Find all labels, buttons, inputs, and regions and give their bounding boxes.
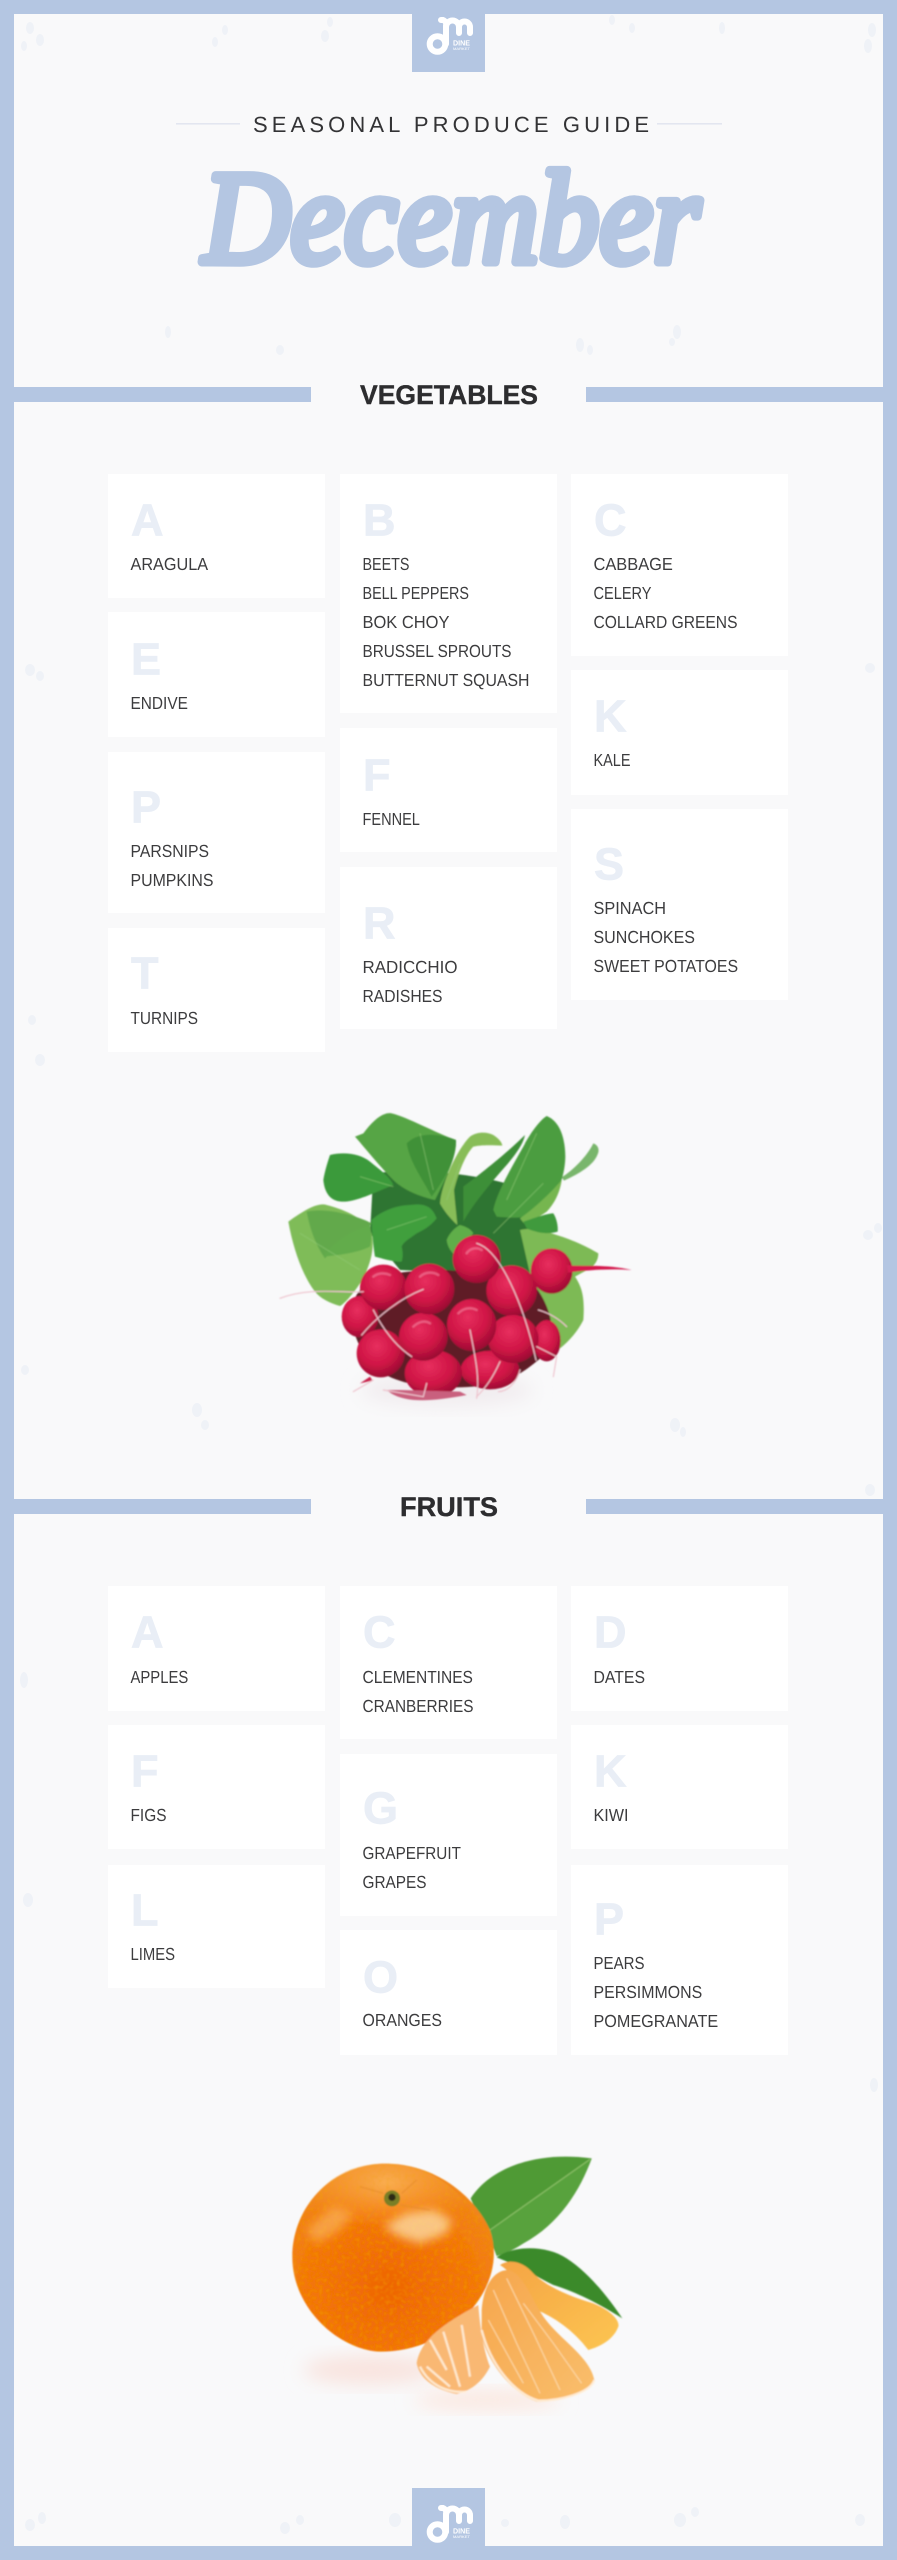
card: fruits F: F — [131, 1746, 158, 1796]
card: vegetables S: SWEET POTATOES — [594, 956, 738, 976]
card: fruits D: DATES — [594, 1667, 645, 1687]
card: vegetables B: BELL PEPPERS — [362, 583, 469, 603]
card: fruits G: GRAPES — [362, 1872, 426, 1892]
card: fruits C: C — [363, 1606, 396, 1658]
card: vegetables B: B — [363, 494, 396, 546]
card: fruits O: ORANGES — [362, 2010, 442, 2030]
card: vegetables R: RADICCHIO — [362, 957, 458, 977]
card: vegetables E — [108, 612, 325, 737]
card: vegetables P: PUMPKINS — [130, 870, 214, 890]
card: vegetables P — [108, 752, 325, 913]
subtitle with rules: SEASONAL PRODUCE GUIDE — [253, 112, 649, 137]
card: fruits C: CLEMENTINES — [362, 1667, 473, 1687]
card: fruits P: PEARS — [594, 1953, 644, 1973]
card: fruits F: FIGS — [130, 1805, 166, 1825]
card: vegetables F: F — [363, 750, 390, 800]
card: fruits K: K — [594, 1746, 627, 1796]
illustration: orange with leaves and segments — [292, 2157, 622, 2410]
card: vegetables P: P — [131, 782, 161, 832]
card: fruits P: PERSIMMONS — [594, 1982, 702, 2002]
card: vegetables T: T — [131, 948, 158, 998]
card: fruits O — [340, 1930, 557, 2055]
card: fruits P: POMEGRANATE — [594, 2011, 718, 2031]
card: vegetables B — [340, 474, 557, 713]
card: fruits K: KIWI — [594, 1805, 628, 1825]
logo: bottom — [412, 2488, 485, 2560]
section header: vegetables: VEGETABLES — [360, 380, 538, 410]
card: fruits L: LIMES — [130, 1944, 175, 1964]
card: vegetables C: CABBAGE — [594, 554, 673, 574]
segment: back — [500, 2262, 619, 2350]
card: vegetables B: BOK CHOY — [362, 612, 450, 632]
card: vegetables S: SUNCHOKES — [594, 927, 695, 947]
card: vegetables R — [340, 867, 557, 1029]
card: fruits D: D — [594, 1606, 626, 1658]
segment: front — [482, 2270, 594, 2402]
card: vegetables B: BUTTERNUT SQUASH — [362, 670, 530, 690]
card: fruits G — [340, 1754, 557, 1916]
card: fruits G: G — [363, 1782, 398, 1834]
leaf: upper — [471, 2157, 592, 2256]
card: fruits P — [571, 1865, 788, 2055]
logo: bottom: DINE — [453, 2526, 470, 2536]
rootlets — [280, 1243, 567, 1398]
card: vegetables C: CELERY — [594, 583, 652, 603]
card: vegetables A — [108, 474, 325, 598]
card: vegetables F — [340, 728, 557, 852]
card: vegetables C — [571, 474, 788, 656]
title: December: December — [201, 144, 701, 291]
card: fruits C: CRANBERRIES — [362, 1696, 474, 1716]
logo: top — [412, 0, 485, 72]
segment: left — [417, 2305, 490, 2394]
card: fruits K — [571, 1725, 788, 1849]
panel: fruits cards — [108, 1586, 788, 2055]
card: fruits G: GRAPEFRUIT — [362, 1843, 461, 1863]
leaf: lower — [497, 2248, 622, 2318]
card: vegetables K: KALE — [594, 750, 630, 770]
card: vegetables A: A — [131, 494, 164, 546]
card: vegetables S: SPINACH — [594, 898, 666, 918]
section header: vegetables — [14, 380, 883, 410]
card: vegetables P: PARSNIPS — [130, 841, 209, 861]
card: vegetables B: BEETS — [362, 554, 410, 574]
section header: fruits: FRUITS — [400, 1492, 498, 1522]
radish roots — [342, 1296, 378, 1337]
card: vegetables C: C — [594, 494, 626, 546]
stem — [384, 2190, 400, 2206]
card: fruits A: A — [131, 1606, 164, 1658]
logo: top: DINE — [453, 38, 470, 48]
card: fruits L: L — [131, 1884, 158, 1936]
card: vegetables K — [571, 670, 788, 795]
card: vegetables R: RADISHES — [362, 986, 442, 1006]
card: fruits O: O — [363, 1952, 398, 2002]
panel: vegetables cards — [108, 474, 788, 1052]
orange body — [292, 2164, 494, 2352]
card: vegetables E: E — [131, 634, 161, 684]
card: fruits A: APPLES — [130, 1667, 188, 1687]
card: vegetables K: K — [594, 690, 627, 742]
card: vegetables T: TURNIPS — [130, 1008, 198, 1028]
card: fruits F — [108, 1725, 325, 1849]
card: vegetables F: FENNEL — [362, 809, 420, 829]
card: fruits C — [340, 1586, 557, 1739]
card: fruits L — [108, 1865, 325, 1988]
card: vegetables A: ARAGULA — [130, 554, 208, 574]
section header: fruits — [14, 1492, 883, 1522]
card: vegetables B: BRUSSEL SPROUTS — [362, 641, 512, 661]
card: vegetables R: R — [363, 898, 396, 948]
card: vegetables S — [571, 809, 788, 1000]
card: fruits D — [571, 1586, 788, 1711]
card: vegetables E: ENDIVE — [130, 693, 188, 713]
illustration: radish bunch — [280, 1113, 632, 1407]
card: vegetables C: COLLARD GREENS — [594, 612, 738, 632]
card: vegetables T — [108, 928, 325, 1052]
card: vegetables S: S — [594, 838, 624, 890]
card: fruits A — [108, 1586, 325, 1711]
logo: top: MARKET — [453, 47, 471, 51]
card: fruits P: P — [594, 1894, 624, 1944]
logo: bottom: MARKET — [453, 2535, 471, 2539]
